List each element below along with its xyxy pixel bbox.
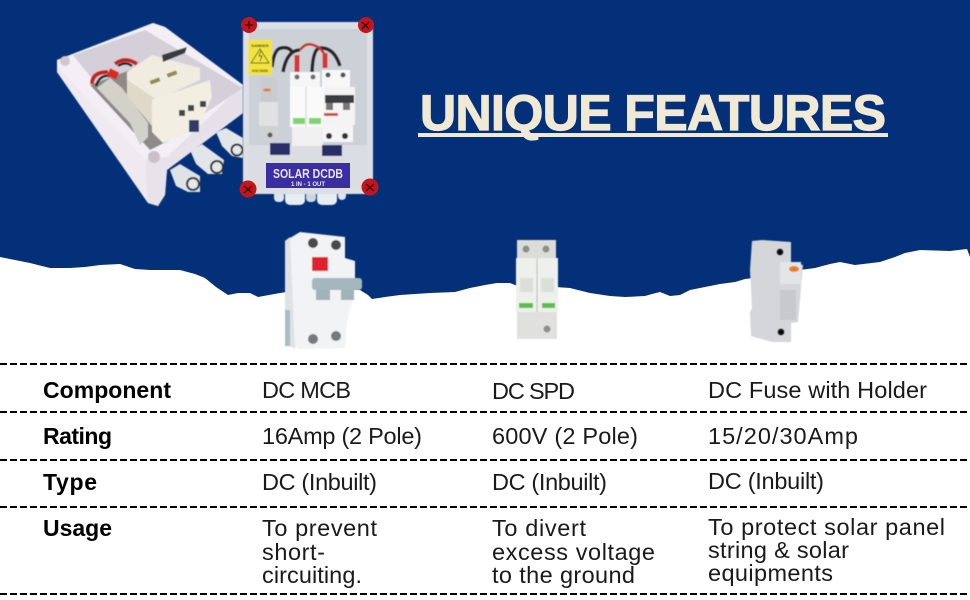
row: type: DC (Inbuilt)	[262, 469, 377, 495]
product: DC SPD	[516, 240, 558, 339]
SPD in cover	[290, 72, 320, 88]
product: open enclosure	[57, 23, 243, 206]
row: usage: equipments	[708, 560, 833, 586]
row: type: Type	[43, 469, 97, 495]
row: rating: Rating	[43, 423, 112, 449]
row: rating: 600V (2 Pole)	[492, 423, 638, 449]
red corner screws	[240, 17, 378, 198]
row: rating	[43, 423, 858, 449]
row: type: DC (Inbuilt)	[492, 469, 607, 495]
product: closed enclosure with transparent cover	[243, 22, 373, 205]
label plate: solar dcdb: SOLAR DCDB	[273, 167, 343, 181]
MCB in cover	[322, 70, 350, 87]
product: DC fuse holder	[750, 240, 803, 342]
product: DC MCB	[285, 232, 362, 349]
row: usage: To prevent	[262, 515, 377, 541]
row: usage: To divert	[492, 515, 586, 541]
cable glands	[170, 128, 244, 192]
row: component: DC MCB	[262, 377, 351, 403]
row: usage: string & solar	[708, 537, 849, 563]
white torn paper area	[0, 249, 970, 600]
row: component: DC Fuse with Holder	[708, 377, 927, 403]
label plate: solar dcdb	[266, 163, 350, 188]
row: component: DC SPD	[492, 378, 575, 404]
row: usage: short-	[262, 539, 325, 565]
title: UNIQUE FEATURES	[420, 85, 886, 141]
row: component	[43, 377, 927, 404]
row: usage: Usage	[43, 515, 112, 541]
row: usage: To protect solar panel	[708, 514, 945, 540]
row: usage: circuiting.	[262, 562, 362, 588]
danger sticker	[248, 40, 272, 75]
danger sticker: DANGER	[251, 43, 269, 48]
label plate: solar dcdb: 1 IN - 1 OUT	[291, 181, 325, 188]
row: rating: 16Amp (2 Pole)	[262, 423, 422, 449]
row: component: Component	[43, 377, 171, 403]
table dashed dividers	[0, 364, 970, 594]
fuse in cover	[261, 78, 277, 104]
row: usage: excess voltage	[492, 539, 655, 565]
row: usage: to the ground	[492, 562, 635, 588]
row: rating: 15/20/30Amp	[708, 423, 858, 449]
danger sticker: VOLTAGE	[252, 69, 269, 73]
row: type: DC (Inbuilt)	[708, 468, 824, 494]
row: type	[43, 468, 824, 495]
row: usage	[43, 514, 945, 588]
